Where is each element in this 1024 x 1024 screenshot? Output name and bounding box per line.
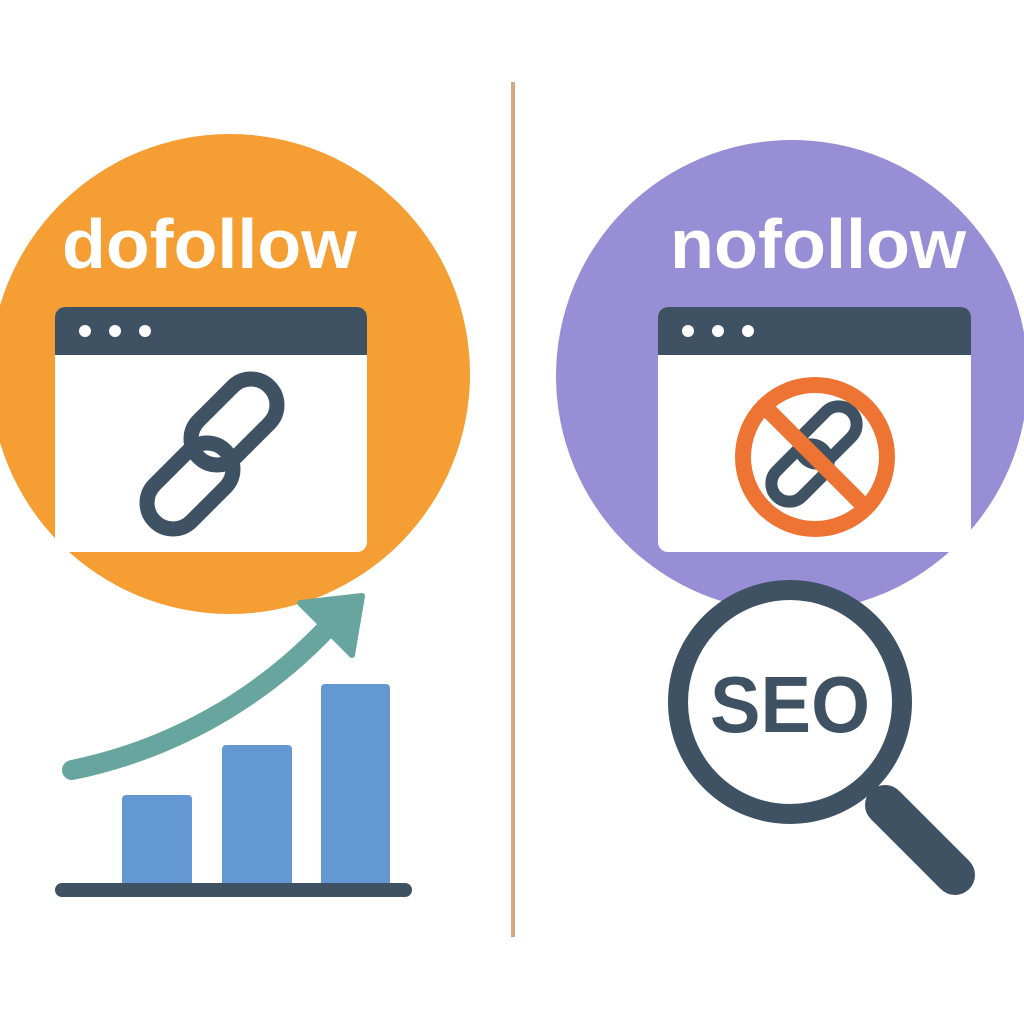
browser window: nofollow	[658, 307, 971, 552]
icon: no-link	[743, 385, 887, 529]
icon: magnifier SEO	[678, 590, 955, 875]
icon: magnifier SEO: SEO	[710, 660, 870, 749]
heading: nofollow: nofollow	[670, 205, 967, 283]
orange circle	[0, 134, 470, 614]
panel: nofollow	[556, 140, 1024, 875]
purple circle	[556, 140, 1024, 612]
heading: dofollow: dofollow	[62, 205, 358, 283]
browser window: dofollow	[55, 307, 367, 552]
icon: link chain	[136, 368, 288, 540]
divider	[511, 82, 515, 937]
arrow: growth	[72, 596, 362, 770]
bar chart	[55, 684, 412, 897]
panel: dofollow	[0, 134, 470, 897]
